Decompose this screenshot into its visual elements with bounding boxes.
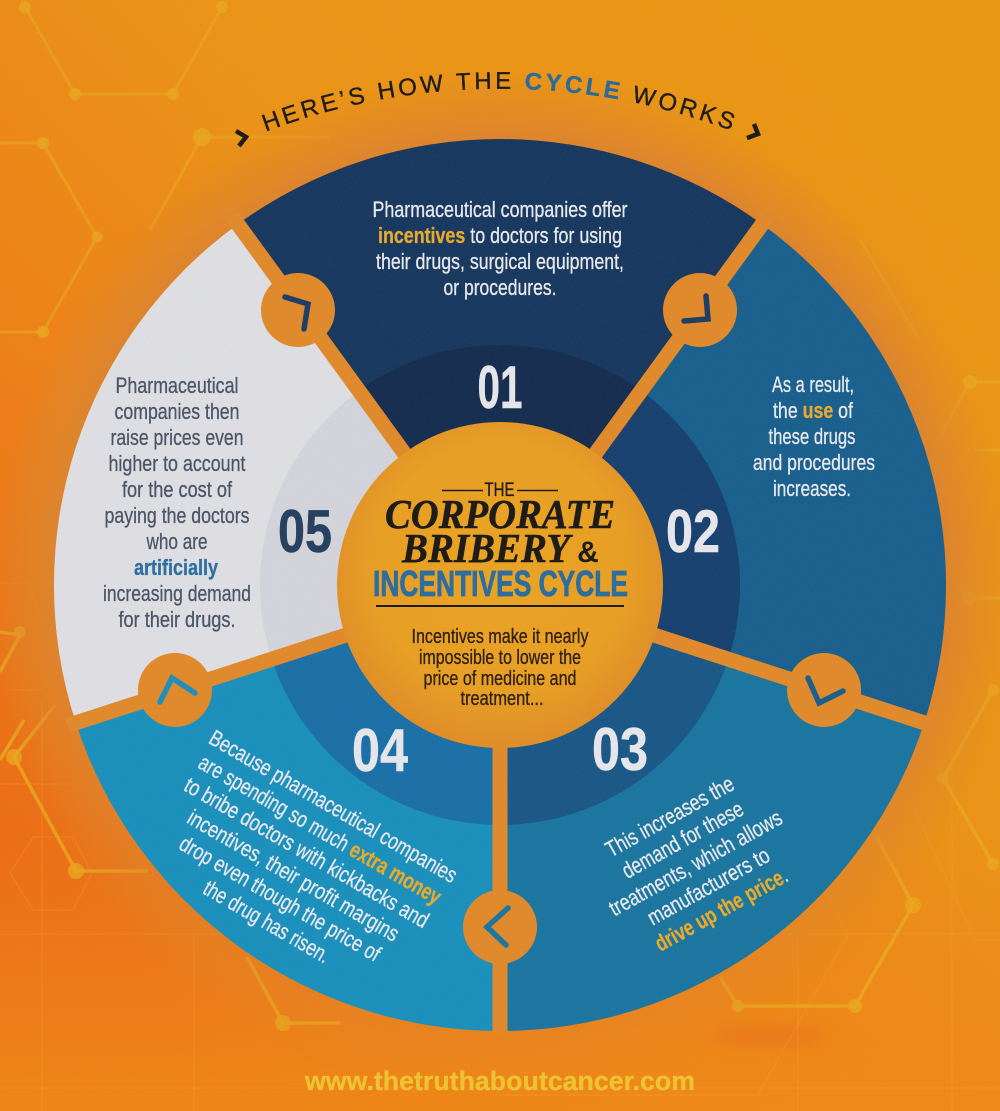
arrow node: 04 to 05: [138, 653, 212, 727]
step 04 text: incentives, their profit margins: [183, 805, 404, 947]
step 05 text: for their drugs.: [118, 607, 236, 632]
heading: here's how the cycle works: HERE’S HOW THE CYCLE WORKS: [262, 72, 734, 132]
step 02 text: As a result,: [772, 372, 854, 397]
step 03 text: demand for these: [618, 796, 748, 883]
title line: incentives cycle: INCENTIVES CYCLE: [373, 563, 628, 604]
step 04 text: to bribe doctors with kickbacks and: [180, 772, 433, 933]
background molecule lines top: [0, 7, 1000, 450]
hub description: price of medicine and: [424, 668, 576, 690]
inner ring: step 01: [359, 345, 641, 585]
inner ring: step 05: [260, 391, 500, 659]
title line: the: [442, 480, 558, 501]
step 05 text: who are: [146, 529, 208, 554]
step 05 text: increasing demand: [103, 581, 251, 606]
hub description: impossible to lower the: [419, 647, 581, 669]
step 05 text: Pharmaceutical: [116, 373, 238, 398]
step 05 text: raise prices even: [110, 425, 244, 450]
website footer: www.thetruthaboutcancer.com: [304, 1066, 695, 1096]
hub description: treatment...: [460, 688, 544, 710]
step 02 text: these drugs: [768, 424, 856, 449]
step 04 text: Because pharmaceutical companies: [205, 725, 462, 888]
arrow node: 02 to 03: [787, 653, 861, 727]
panel: step 02: [500, 224, 946, 723]
title rule: [376, 605, 624, 607]
cycle wheel: [54, 139, 946, 1033]
background molecule lines bottom: [0, 560, 1000, 1023]
step 04 number: 04: [352, 717, 409, 784]
step 03 text: [579, 759, 812, 968]
step 04 text: drop even though the price of: [175, 831, 386, 967]
center hub: [337, 422, 663, 748]
step 05 number: 05: [278, 498, 332, 565]
step 05 text: higher to account: [108, 451, 246, 476]
step 01 text: [372, 197, 628, 300]
arrow node: 03 to 04: [463, 890, 537, 964]
panel: step 01: [238, 139, 762, 585]
step 05 text: for the cost of: [122, 477, 233, 502]
hub description: [412, 626, 588, 710]
step 02 text: increases.: [773, 476, 851, 501]
step 02 text: [753, 372, 875, 501]
arrow node: 01 to 02: [663, 273, 737, 347]
step 01 number: 01: [478, 354, 522, 421]
step 01 text: or procedures.: [444, 275, 556, 300]
step 01 text: incentives to doctors for using: [378, 223, 622, 248]
panel: step 03: [500, 585, 924, 1031]
hub title: [373, 480, 628, 604]
step 02 text: the use of: [773, 398, 854, 423]
heading chevron left: [236, 131, 246, 146]
panel: step 05: [54, 224, 500, 723]
heading chevron right: [747, 124, 758, 138]
step 05 text: companies then: [114, 399, 240, 424]
step 01 text: their drugs, surgical equipment,: [376, 249, 624, 274]
title line: corporate: CORPORATE: [385, 491, 615, 537]
step 05 text: [103, 373, 251, 632]
step 01 text: Pharmaceutical companies offer: [372, 197, 628, 222]
step 05 text: paying the doctors: [104, 503, 250, 528]
step 03 number: 03: [592, 716, 648, 783]
inner ring: step 02: [500, 391, 740, 659]
spokes: [67, 217, 933, 1033]
step 03 text: manufacturers to: [643, 842, 774, 930]
step 02 text: and procedures: [753, 450, 875, 475]
background grid and faint hexagons: [0, 583, 1000, 1111]
step 03 text: treatments, which allows: [605, 805, 786, 921]
hub description: Incentives make it nearly: [412, 626, 588, 648]
arrow node: 05 to 01: [261, 273, 335, 347]
inner ring: step 04: [272, 585, 500, 825]
step 03 text: This increases the: [601, 771, 738, 862]
step 02 number: 02: [666, 498, 720, 565]
step 04 text: [138, 725, 462, 1003]
step 05 text: artificially: [134, 555, 218, 580]
panel: step 04: [76, 585, 500, 1031]
title line: bribery: BRIBERY: [401, 525, 574, 571]
inner ring: step 03: [500, 585, 728, 825]
step 04 text: are spending so much extra money: [194, 750, 446, 910]
title ampersand: &: [577, 536, 599, 569]
title line: the: THE: [484, 480, 514, 501]
step 04 text: the drug has risen.: [199, 875, 334, 968]
step 03 text: drive up the price.: [651, 863, 792, 956]
